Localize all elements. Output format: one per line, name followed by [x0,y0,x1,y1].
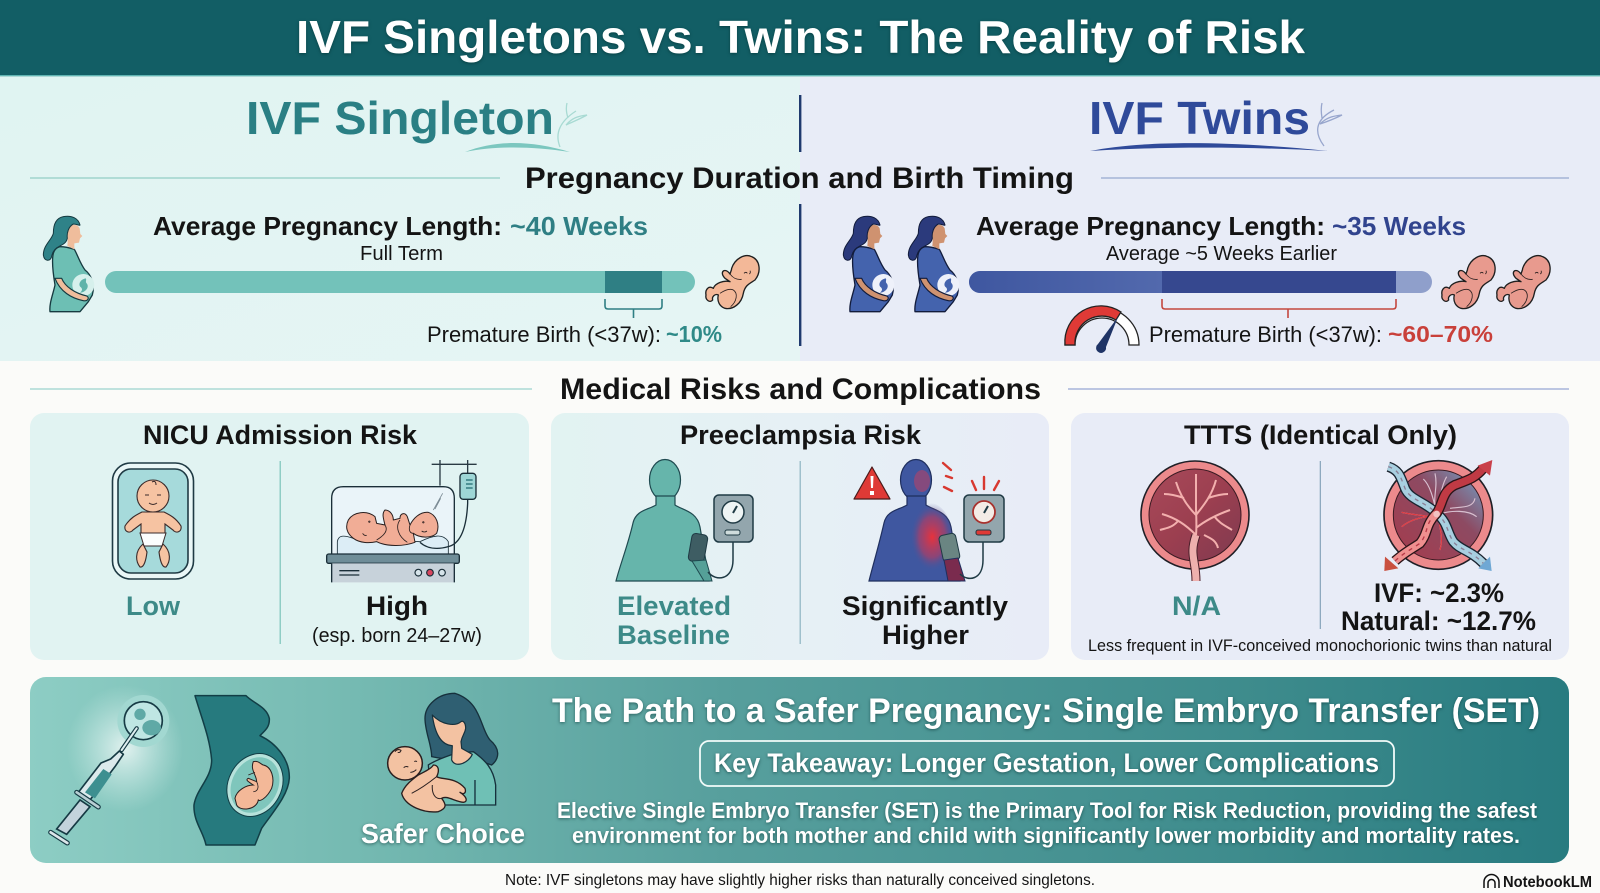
callout: key takeaway: Key Takeaway: Longer Gestation, Lower Complications [714,748,1379,778]
text: TTTS figures: Natural: ~12.7% [1341,606,1536,636]
text: Safer Choice: Safer Choice [361,818,525,849]
icon: warning triangle [854,467,890,499]
panel: singleton background [0,77,800,361]
text: singleton average length: ~40 Weeks [510,211,648,241]
text: premature birth twins: Premature Birth (<37w): [1149,322,1382,347]
icon: teal person with blood pressure cuff [616,460,753,581]
text: elevated baseline: Elevated [617,591,731,621]
text: significantly higher [842,591,1008,650]
text: elevated baseline [617,591,731,650]
icon: incubator [327,460,477,582]
bar: twins timeline [969,271,1432,318]
text: significantly higher: Significantly [842,591,1008,621]
panel: twins background [800,77,1600,361]
icon: pregnant belly with fetus [194,696,294,845]
section heading: Pregnancy Duration and Birth Timing: Pregnancy Duration and Birth Timing [525,162,1074,195]
text: premature birth twins: ~60–70% [1388,321,1493,347]
text: SET description: Elective Single Embryo Transfer (SET) is the Primary Tool for Risk Reduction, providing the safest [557,798,1537,823]
text: singleton average length [153,211,648,241]
heading: preeclampsia: Preeclampsia Risk [680,420,922,450]
text: singleton average length: Average Pregnancy Length: [153,211,502,241]
text: Full Term: Full Term [360,243,443,265]
panel: Single Embryo Transfer [30,677,1569,863]
text: SET description [557,798,1537,848]
panel: preeclampsia risk [551,413,1049,660]
text: TTTS figures [1341,578,1536,636]
icon: healthy baby in crib [112,463,194,579]
text: Low: Low [126,591,181,621]
heading: IVF Twins: IVF Twins [1089,92,1310,144]
icon: mother holding baby [388,693,498,812]
text: TTTS figures: IVF: ~2.3% [1374,578,1504,608]
text: SET description: environment for both mother and child with significantly lower morbidity and mortality rates. [572,823,1520,848]
text: twins average length: Average Pregnancy Length: [976,211,1325,241]
icon: pregnant woman singleton [43,216,94,312]
header banner [0,0,1600,76]
text: High: High [366,591,428,621]
text: premature birth twins [1149,321,1493,347]
logo: NotebookLM: NotebookLM [1503,874,1592,891]
text: esp. born: (esp. born 24–27w) [312,625,482,647]
text: twins average length: ~35 Weeks [1332,211,1466,241]
section heading: Medical Risks and Complications: Medical Risks and Complications [560,373,1041,406]
text: Average 5 weeks earlier: Average ~5 Weeks Earlier [1106,243,1337,265]
text: elevated baseline: Baseline [617,620,730,650]
title: IVF Singletons vs. Twins: The Reality of Risk [296,11,1305,63]
panel: TTTS [1071,413,1569,660]
text: premature birth singleton: ~10% [666,321,722,347]
heading: SET: The Path to a Safer Pregnancy: Single Embryo Transfer (SET) [552,692,1540,730]
heading: NICU: NICU Admission Risk [143,420,418,450]
icon: blue person with high blood pressure [869,460,1004,581]
text: significantly higher: Higher [882,620,969,650]
icon: risk gauge [1065,306,1139,353]
bar: singleton timeline [105,271,695,318]
footnote: Note: IVF singletons may have slightly higher risks than naturally conceived singletons. [505,872,1095,889]
icon: syringe and embryo [51,685,183,843]
icon: fetus singleton [706,256,759,309]
icon: healthy placenta [1141,461,1249,581]
heading: TTTS: TTTS (Identical Only) [1184,420,1457,450]
icon: pregnant woman twin 1 [843,216,894,312]
callout: key takeaway [700,741,1394,786]
icon: placenta with TTTS [1384,460,1493,571]
icon: pregnant woman twin 2 [908,216,959,312]
panel: NICU admission risk [30,413,529,660]
icon: fetus twin 1 [1442,256,1495,309]
text: TTTS note: Less frequent in IVF-conceived monochorionic twins than natural [1088,636,1552,655]
heading: IVF Singleton: IVF Singleton [246,92,554,144]
text: premature birth singleton: Premature Birth (<37w): [427,322,661,347]
text: N/A: N/A [1172,591,1221,621]
icon: fetus twin 2 [1497,256,1550,309]
